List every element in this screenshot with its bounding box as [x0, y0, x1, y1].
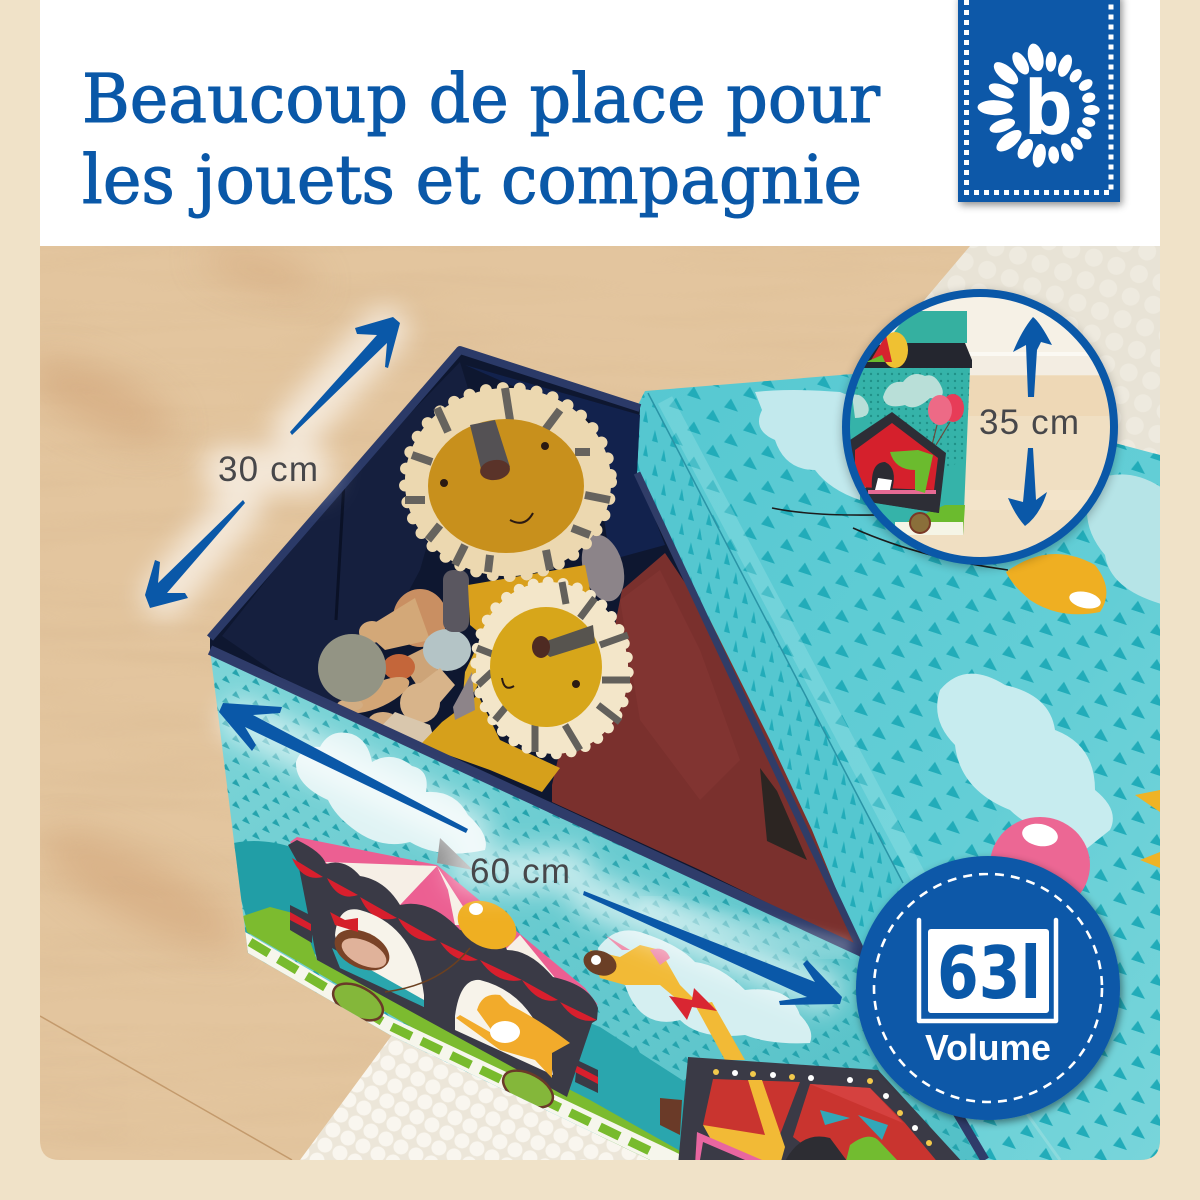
title: Beaucoup de place pour: [82, 60, 881, 138]
car body: [288, 840, 598, 1097]
train car: [288, 837, 598, 1115]
eye and smile: [572, 680, 580, 688]
logo letter b: b: [1025, 65, 1072, 150]
flag: [437, 838, 473, 870]
inset wheel: [910, 513, 930, 533]
interior left wall: [222, 362, 470, 720]
white rug bottom: [300, 1035, 650, 1160]
wheels: [327, 976, 559, 1115]
tiger: [456, 995, 570, 1078]
arrow: 30 cm downward: [145, 500, 245, 608]
couplers: [290, 905, 598, 1093]
striped arm: [443, 570, 469, 632]
pink balloon: [990, 817, 1090, 894]
body: [468, 565, 590, 630]
pink window: [695, 1132, 762, 1165]
title: les jouets et compagnie: [82, 141, 862, 219]
volume badge: [856, 856, 1120, 1120]
lid cloud large: [937, 674, 1113, 850]
crocodile: [845, 1137, 897, 1165]
inset green ground: [895, 505, 965, 535]
teal hill left: [225, 841, 330, 960]
lid fold strip: [630, 390, 910, 960]
scalloped red trim: [292, 858, 597, 1021]
maroon blanket: [552, 553, 860, 948]
arrow: height up: [1013, 317, 1052, 397]
beaker icon: [919, 920, 1056, 1021]
inset wall and floor: [840, 285, 1120, 570]
lid cloud right: [1087, 474, 1165, 605]
carpet top right: [923, 246, 1160, 455]
blanket dark gap: [760, 768, 807, 860]
face: [428, 419, 584, 553]
mane stripes: [477, 582, 630, 752]
logo flower: [977, 42, 1100, 169]
arrow: 30 cm upward: [290, 317, 400, 435]
monkey: [328, 921, 396, 979]
label: 30 cm: 30 cm: [218, 450, 318, 489]
photo panel: [16, 239, 1165, 1165]
body: [420, 695, 560, 792]
front cloud: [296, 733, 486, 854]
spotted paw: [453, 672, 475, 720]
wood floor: [16, 239, 1160, 1160]
balloon string: [772, 508, 1008, 570]
monkey window: [335, 909, 424, 1007]
wooden toys: [318, 589, 471, 760]
giraffe: [580, 935, 745, 1060]
title: [82, 60, 881, 219]
arrow glow: [165, 330, 820, 990]
box interior: [207, 346, 768, 904]
yellow star edge: [1135, 790, 1160, 868]
inset wagon: [850, 412, 946, 513]
yellow balloon: [1006, 554, 1106, 614]
arrow: 60 cm leftward: [219, 703, 468, 833]
mane: [405, 388, 611, 576]
arrow: height down: [1008, 448, 1047, 526]
mane: [470, 576, 634, 760]
coupler: [660, 1098, 682, 1135]
lion toy front: [420, 572, 639, 792]
lights: [713, 1069, 932, 1146]
arm: [464, 610, 492, 692]
penguin: [783, 1137, 850, 1165]
header panel: [40, 0, 1160, 246]
green hill: [243, 907, 705, 1165]
storage box lid: [630, 370, 1165, 1160]
front cloud right: [598, 930, 811, 1043]
inset cloud: [883, 374, 943, 407]
inset circle: height: [840, 285, 1120, 570]
label: 35 cm: 35 cm: [979, 403, 1079, 442]
nose: [470, 420, 510, 473]
storage box front: [205, 640, 995, 1165]
label: Volume: Volume: [925, 1027, 1051, 1068]
train track: [245, 932, 692, 1160]
giraffe in car: [703, 1080, 785, 1165]
inset balloons: [942, 394, 964, 422]
inset penguin: [872, 462, 894, 490]
car roof: [290, 837, 598, 1005]
lid edge binding: [637, 473, 860, 948]
teal hill right: [565, 1023, 690, 1165]
arm: [582, 535, 624, 602]
arrow: 60 cm rightward: [583, 891, 842, 1005]
inset storage box: [845, 311, 972, 535]
blanket fold highlight: [620, 570, 740, 800]
eyes and smile: [440, 479, 448, 487]
box front edge: [210, 650, 862, 952]
inset ring: [846, 293, 1114, 561]
balloon: [449, 891, 525, 959]
mane stripes: [405, 388, 610, 572]
second train car: [660, 1057, 965, 1165]
face: [490, 607, 602, 727]
tiger window: [455, 980, 553, 1075]
label: 60 cm: 60 cm: [470, 852, 570, 891]
beaker icon: 63l: [937, 931, 1041, 1015]
inset ball: [882, 332, 908, 368]
inset crocodile: [890, 450, 933, 493]
lid cloud top: [755, 390, 860, 500]
brand logo tag: [958, 0, 1120, 202]
nose: [547, 625, 595, 657]
lion toy back: [405, 388, 631, 640]
rim: [210, 350, 640, 638]
